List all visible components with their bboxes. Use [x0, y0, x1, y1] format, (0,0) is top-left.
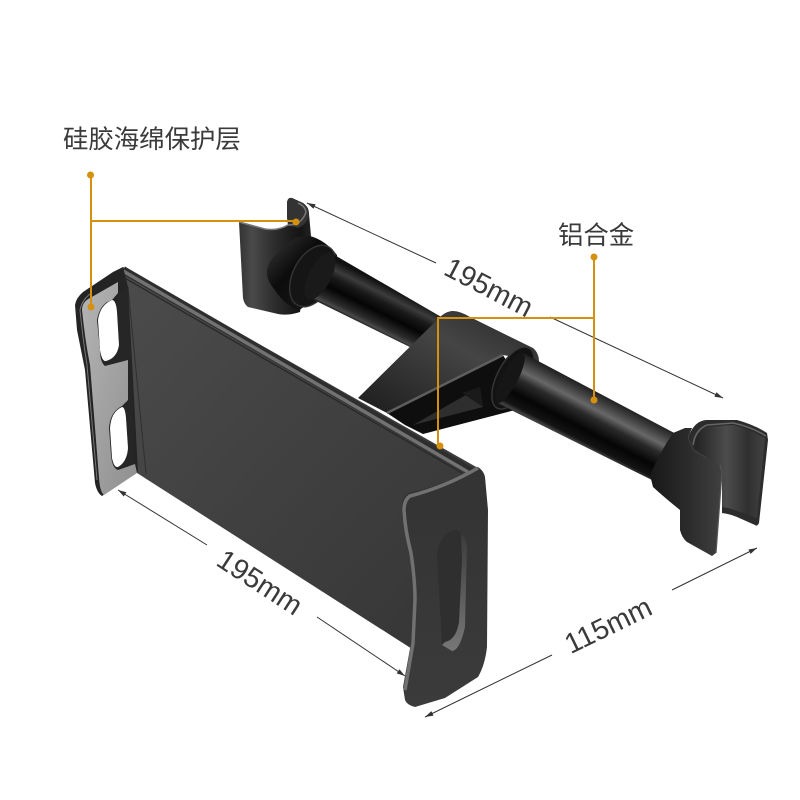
rear left clip — [239, 198, 311, 315]
right holder plate — [402, 467, 488, 707]
dimension label: depth: 115mm — [560, 591, 657, 661]
central hub and strut — [358, 311, 539, 434]
dimension label: panel width: 195mm — [211, 544, 308, 622]
slot in right plate — [437, 530, 467, 650]
dimension label: rod length: 195mm — [439, 252, 538, 324]
telescopic rod, right part — [490, 349, 680, 482]
hole upper white — [98, 300, 119, 361]
hole lower white — [110, 407, 128, 467]
callout: silicone sponge layer: 硅胶海绵保护层 — [63, 126, 241, 154]
dimension arrow: panel width — [118, 490, 405, 676]
tablet holder panel — [118, 267, 478, 654]
callout: aluminium alloy — [436, 222, 634, 450]
callout: silicone sponge layer — [63, 126, 300, 310]
telescopic rod, left part — [298, 248, 450, 352]
rear right clip back arm — [688, 420, 768, 526]
rear right clip front arm and collar — [650, 428, 722, 556]
rod collar at hub — [483, 340, 543, 416]
silver face of plate — [82, 282, 137, 495]
callout: aluminium alloy: 铝合金 — [558, 222, 634, 250]
dimension arrow: rod length — [307, 203, 723, 398]
left holder plate — [75, 267, 138, 496]
slot bevel — [442, 534, 467, 651]
dimension arrow: depth — [425, 548, 757, 717]
clip collar on rear left — [267, 236, 346, 315]
